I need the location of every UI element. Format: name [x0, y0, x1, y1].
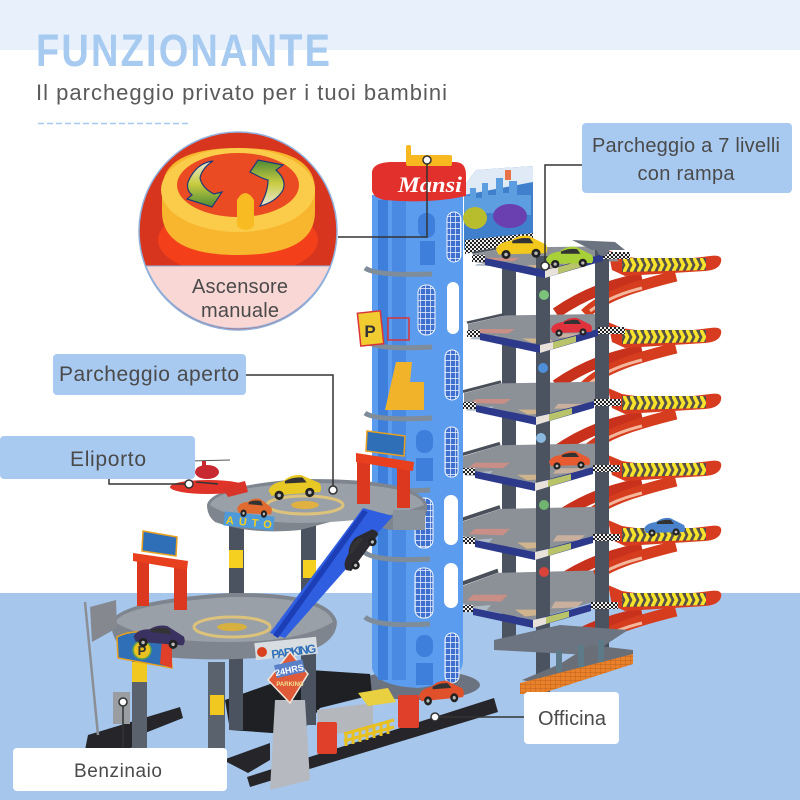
top deck details: [572, 240, 625, 256]
auto sign: AUTO: [225, 515, 273, 531]
parking label: [254, 637, 318, 662]
zoom circle: manual lift: manuale: [201, 300, 279, 322]
helicopter: [190, 460, 230, 484]
label: gas station: Benzinaio: [74, 761, 162, 782]
upper red arch: [356, 431, 414, 508]
lower deck surface: [111, 593, 337, 659]
tower windows: [415, 212, 461, 683]
upper deck pillars: [229, 520, 244, 610]
gray spiral rings: [364, 268, 432, 625]
leader: gas station: [119, 698, 127, 748]
label: heliport: [0, 436, 195, 479]
street sign: [85, 600, 117, 735]
leader: lift: [338, 156, 431, 237]
back pillar: [502, 255, 516, 640]
parking diamond sign: [268, 652, 310, 790]
upper parking ramp deck: [207, 431, 427, 610]
red tower cap: [372, 145, 466, 201]
label: seven level parking: Parcheggio a 7 livelli: [592, 135, 780, 157]
label: workshop: [524, 692, 619, 744]
tower base disc: [356, 670, 480, 700]
yellow lift car: [385, 362, 424, 410]
billboard: [463, 166, 533, 254]
dashed divider: [38, 122, 190, 124]
rotation arrows: [187, 161, 222, 207]
tower body: [372, 195, 463, 688]
parking decks: [460, 246, 619, 620]
lower parking deck: [111, 531, 337, 757]
gas pump at left: [113, 692, 130, 724]
lift tower: [357, 145, 466, 688]
tower inner shadows: [378, 200, 459, 685]
purple car: [133, 623, 186, 651]
zoom circle: manual lift: [139, 132, 337, 330]
ramps: [556, 250, 721, 649]
P sign: [117, 632, 172, 668]
cars on decks: [496, 236, 685, 537]
leader: heliport: [109, 479, 193, 488]
lift knob: [158, 148, 318, 276]
seven-level parking structure: [460, 166, 721, 696]
deck strips: [460, 252, 630, 628]
pin: [237, 193, 254, 230]
welcome parking sign: P: [364, 322, 376, 341]
orange car at fuel pump: [418, 679, 465, 706]
red tower cap: Mansi: [397, 172, 463, 197]
leader: open parking: [246, 375, 337, 494]
label: open parking: [53, 354, 246, 395]
yellow car: [268, 474, 322, 500]
lower red arch: [133, 531, 188, 610]
subtitle: Il parcheggio privato per i tuoi bambini: [36, 80, 447, 105]
upper deck: [207, 479, 427, 531]
caption text: Ascensore: [192, 276, 288, 298]
leader: workshop: [431, 713, 524, 721]
ground platform: [494, 625, 633, 694]
fuel pumps and fence: [317, 695, 419, 754]
label: workshop: Officina: [538, 708, 607, 730]
P sign: P: [138, 643, 147, 658]
label: seven level parking: [582, 123, 792, 193]
label: open parking: Parcheggio aperto: [59, 363, 239, 386]
title: FUNZIONANTE: [36, 25, 330, 76]
lower pillars: [132, 660, 147, 755]
parking label: PARKING: [270, 641, 317, 662]
leader: seven levels: [541, 165, 582, 270]
gas station base: [84, 670, 498, 787]
label: gas station: [13, 748, 227, 791]
white and orange car: [236, 497, 273, 519]
blue slide ramp: [270, 508, 393, 638]
parking diamond sign: PARKING: [276, 682, 304, 688]
caption band: [146, 266, 330, 328]
label: heliport: Eliporto: [70, 448, 146, 471]
red helipad: [170, 460, 248, 497]
welcome parking sign: [357, 311, 409, 346]
parking diamond sign: 24HRS: [274, 662, 305, 678]
pillars: [536, 250, 609, 696]
label: seven level parking: con rampa: [638, 163, 735, 185]
